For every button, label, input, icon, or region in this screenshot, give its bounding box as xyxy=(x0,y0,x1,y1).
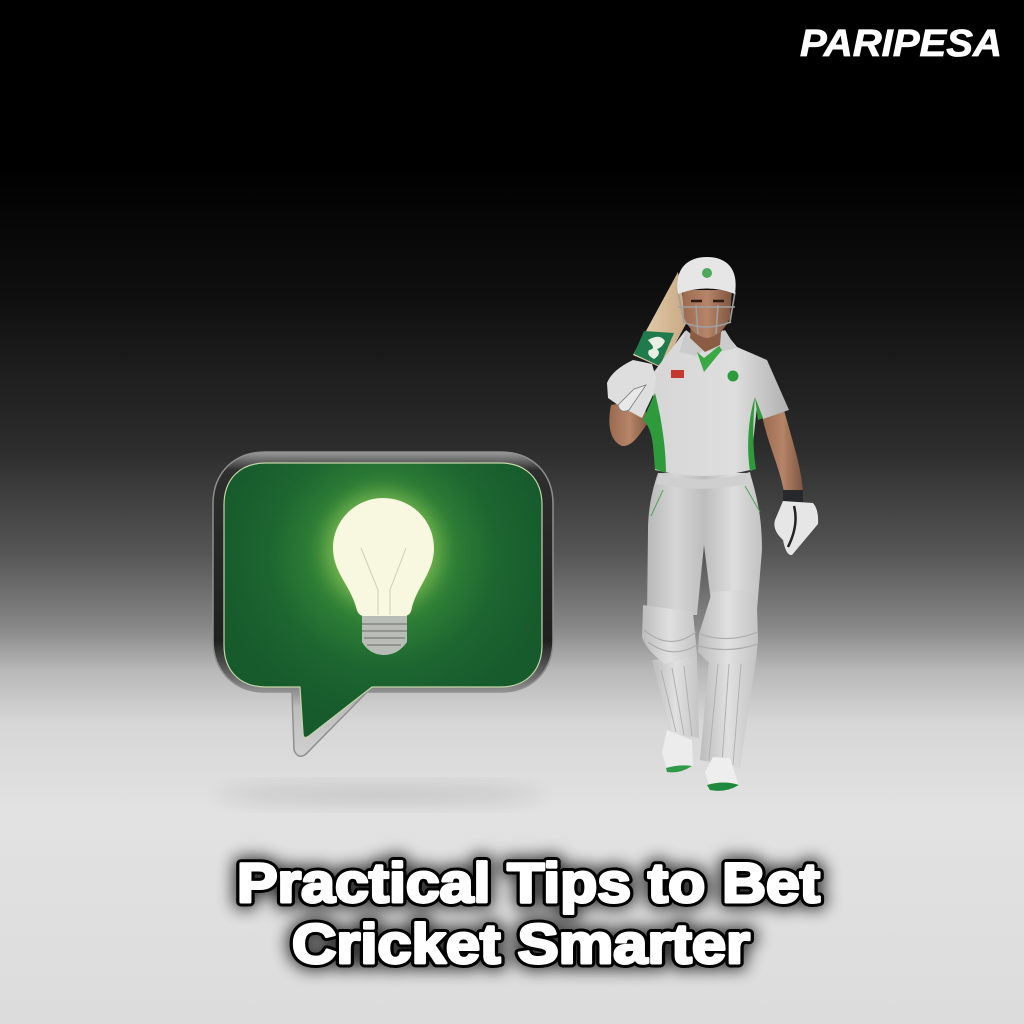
bat blade xyxy=(633,272,687,368)
logo: PARIPESA: PARIPESA xyxy=(800,23,1002,65)
helmet crest xyxy=(702,268,712,278)
right shoe green sole xyxy=(707,782,739,791)
left knee folds xyxy=(644,630,697,652)
glove xyxy=(774,501,818,555)
bulb filament xyxy=(361,548,406,615)
left shoe green sole xyxy=(666,765,692,772)
waistband xyxy=(656,472,752,489)
right leg pad xyxy=(698,590,758,768)
left shoe xyxy=(662,730,693,772)
cricket bat xyxy=(633,272,687,368)
bat sticker xyxy=(634,331,674,366)
player far arm xyxy=(609,400,650,446)
title text xyxy=(237,851,820,975)
face xyxy=(682,290,732,338)
green trouser piping xyxy=(651,486,760,516)
left pad ribs xyxy=(661,666,692,736)
title text: Cricket Smarter xyxy=(292,912,750,975)
bat grip end xyxy=(618,385,646,411)
left leg pad xyxy=(642,605,699,738)
bubble metal frame xyxy=(213,452,553,756)
player right glove xyxy=(774,490,818,555)
green placket xyxy=(697,346,722,372)
title shadow: Cricket Smarter xyxy=(292,912,750,975)
title shadow xyxy=(237,851,820,975)
title outline: Cricket Smarter xyxy=(292,912,750,975)
right pad ribs xyxy=(709,664,741,765)
left lower pad xyxy=(652,655,699,738)
bulb glass xyxy=(333,498,434,616)
right shoe xyxy=(705,757,739,790)
shirt body and sleeve xyxy=(653,330,789,476)
bat sticker emblem xyxy=(648,337,665,359)
helmet grille xyxy=(678,292,735,334)
sponsor badge xyxy=(671,370,684,378)
helmet xyxy=(677,257,736,294)
green shirt side panels xyxy=(643,393,763,473)
wrist strap xyxy=(783,490,803,502)
right lower pad xyxy=(700,660,756,768)
title text: Practical Tips to Bet xyxy=(237,851,820,914)
title shadow: Practical Tips to Bet xyxy=(237,851,820,914)
bulb screw base xyxy=(362,615,407,655)
left knee roll xyxy=(642,605,697,664)
cricket player xyxy=(607,257,818,791)
light bulb xyxy=(333,498,434,655)
player trousers xyxy=(647,473,762,615)
neck xyxy=(690,322,722,352)
right knee folds xyxy=(699,632,758,650)
bubble green face xyxy=(224,463,542,737)
shirt crest xyxy=(728,370,738,382)
right knee roll xyxy=(698,590,758,662)
speech bubble with light bulb xyxy=(213,452,553,756)
title outline: Practical Tips to Bet xyxy=(237,851,820,914)
bulb glow xyxy=(325,492,441,608)
glove stripe xyxy=(788,506,796,547)
player right arm xyxy=(762,410,803,492)
title outline xyxy=(237,851,820,975)
speech bubble shadow on floor xyxy=(215,789,545,801)
eyes xyxy=(691,300,724,302)
left glove xyxy=(607,360,656,418)
collar xyxy=(679,330,736,356)
